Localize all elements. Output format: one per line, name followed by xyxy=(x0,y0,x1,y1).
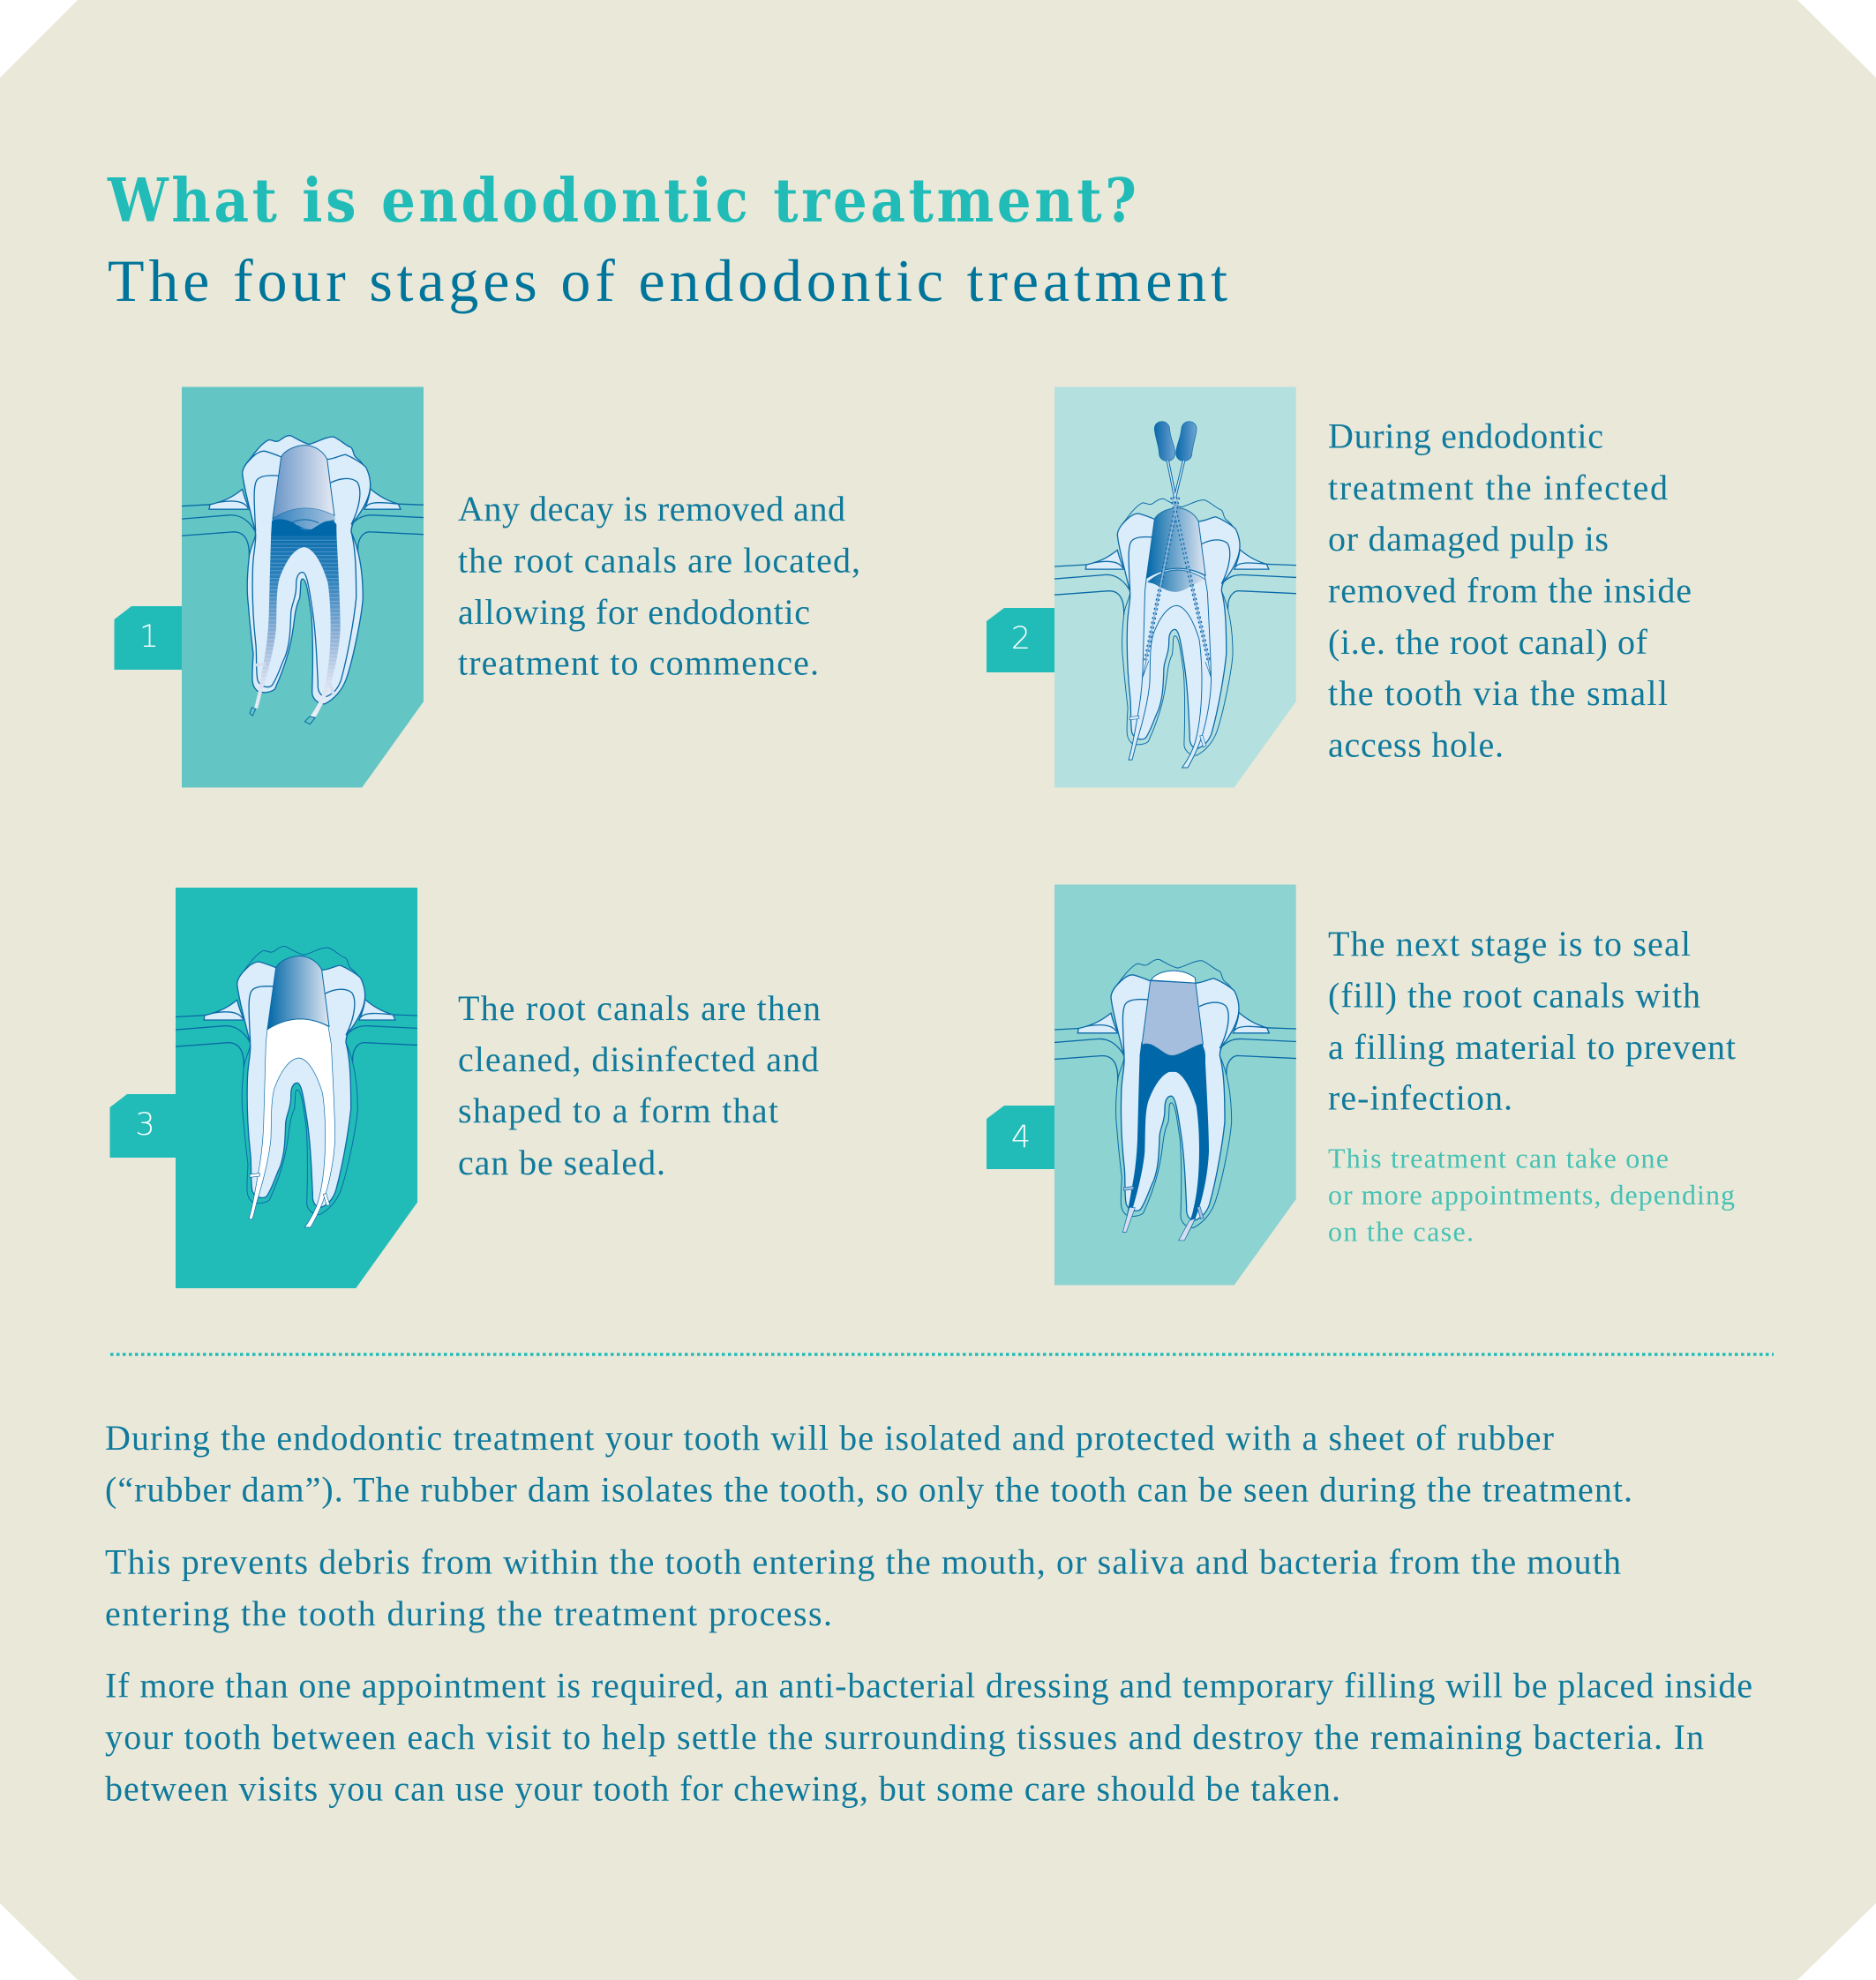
text: stage 3: can be sealed. xyxy=(458,1143,665,1182)
illustration: tooth stage 1 xyxy=(182,386,424,787)
text: stage 3: cleaned, disinfected and xyxy=(458,1039,819,1079)
title: What is endodontic treatment? xyxy=(107,166,1137,236)
text: stage 4: (fill) the root canals with xyxy=(1328,976,1700,1015)
badge: number 3: 3 xyxy=(135,1107,155,1143)
text: stage 3: The root canals are then xyxy=(458,988,821,1028)
note: appointments: This treatment can take one xyxy=(1328,1142,1669,1174)
badge: number 4: 4 xyxy=(1011,1120,1031,1155)
text: stage 1: the root canals are located, xyxy=(458,540,860,581)
badge: number 2 xyxy=(987,608,1054,672)
text: stage 4: a filling material to prevent xyxy=(1328,1027,1736,1067)
text: stage 1 xyxy=(458,489,860,683)
text: rubber dam paragraph 1: During the endodontic treatment your tooth will be isolated and protected with a sheet of rubber xyxy=(105,1418,1554,1458)
badge: number 2: 2 xyxy=(1011,621,1031,656)
panel: stage 2 xyxy=(987,386,1692,787)
icon: endodontic files xyxy=(1143,422,1211,678)
text: multiple appointments paragraph: between visits you can use your tooth for chewing, but some care should be taken. xyxy=(105,1768,1340,1809)
text: stage 2 xyxy=(1328,416,1692,764)
note: appointments: or more appointments, depending xyxy=(1328,1179,1735,1211)
text: stage 2: removed from the inside xyxy=(1328,570,1692,611)
text: rubber dam paragraph 1: (“rubber dam”). The rubber dam isolates the tooth, so only the tooth can be seen during the treatment. xyxy=(105,1470,1632,1509)
text: stage 1: allowing for endodontic xyxy=(458,592,810,632)
text: stage 2: (i.e. the root canal) of xyxy=(1328,622,1648,662)
badge: number 3 xyxy=(109,1094,176,1158)
badge: number 4 xyxy=(987,1106,1054,1169)
text: stage 3 xyxy=(458,988,821,1182)
text: stage 3: shaped to a form that xyxy=(458,1091,778,1130)
text: stage 2: treatment the infected xyxy=(1328,468,1668,507)
text: rubber dam paragraph 2 xyxy=(105,1542,1621,1633)
text: stage 4: re-infection. xyxy=(1328,1078,1512,1117)
text: multiple appointments paragraph: your tooth between each visit to help settle the surrounding tissues and destroy the remaining bacteria. In xyxy=(105,1717,1704,1757)
illustration: tooth stage 4 xyxy=(1054,884,1296,1285)
panel: stage 3 xyxy=(109,888,821,1288)
text: stage 4 xyxy=(1328,924,1736,1117)
badge: number 1: 1 xyxy=(139,619,159,655)
subtitle: The four stages of endodontic treatment xyxy=(108,247,1227,314)
illustration: tooth stage 3 xyxy=(176,888,417,1288)
text: stage 2: access hole. xyxy=(1328,725,1504,764)
panel: stage 4 xyxy=(987,884,1736,1285)
text: stage 1: treatment to commence. xyxy=(458,642,819,683)
illustration: tooth stage 2 with files xyxy=(1054,386,1296,787)
panel: stage 1 xyxy=(115,386,860,787)
text: multiple appointments paragraph: If more than one appointment is required, an anti-bacterial dressing and temporary filling will be placed inside xyxy=(105,1666,1752,1705)
text: stage 4: The next stage is to seal xyxy=(1328,924,1691,964)
text: stage 2: During endodontic xyxy=(1328,416,1603,455)
text: rubber dam paragraph 1 xyxy=(105,1418,1632,1509)
badge: number 1 xyxy=(115,606,182,670)
note: appointments: on the case. xyxy=(1328,1216,1474,1248)
text: stage 2: or damaged pulp is xyxy=(1328,519,1609,559)
text: stage 1: Any decay is removed and xyxy=(458,489,845,529)
text: multiple appointments paragraph xyxy=(105,1666,1752,1809)
text: rubber dam paragraph 2: entering the tooth during the treatment process. xyxy=(105,1594,832,1633)
text: rubber dam paragraph 2: This prevents debris from within the tooth entering the mouth, or saliva and bacteria from the mouth xyxy=(105,1542,1621,1581)
text: stage 2: the tooth via the small xyxy=(1328,673,1668,713)
note: appointments xyxy=(1328,1142,1735,1248)
